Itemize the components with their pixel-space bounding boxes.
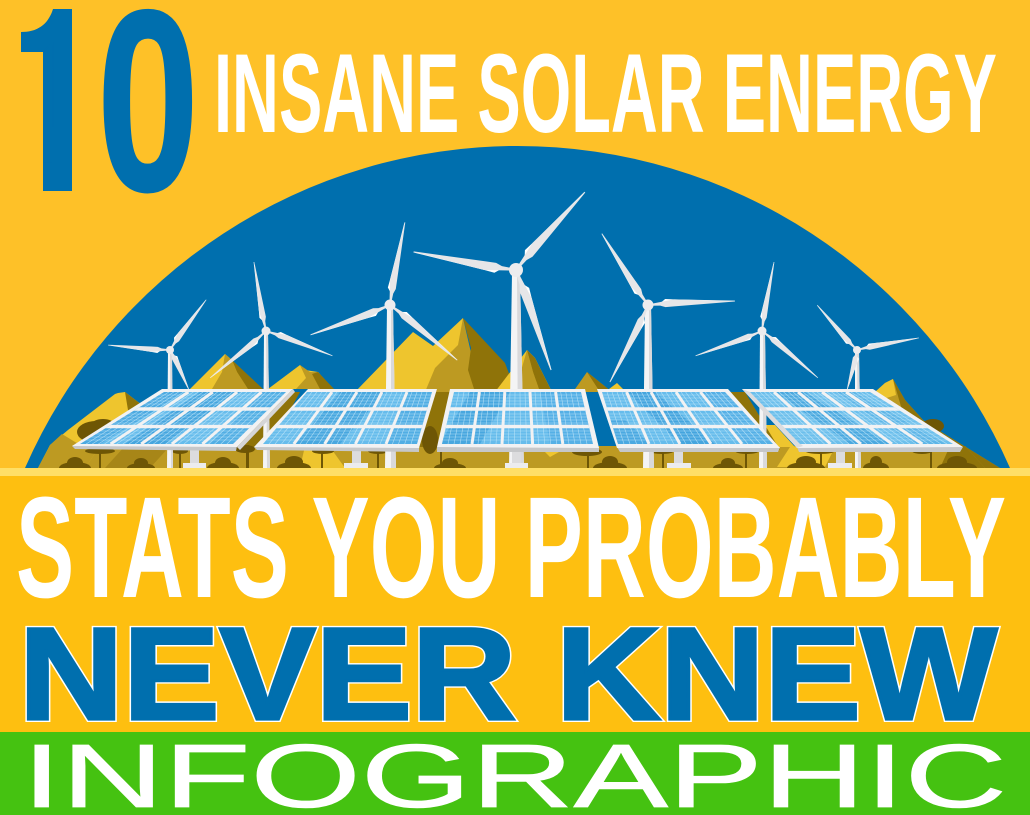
solar panel 4 — [597, 389, 780, 452]
turbine 3 — [309, 221, 461, 468]
trees — [59, 419, 977, 474]
solar panel stands — [183, 449, 852, 468]
solar panel 3 — [437, 389, 599, 452]
title line: never knew: NEVER KNEW — [19, 600, 997, 747]
sky dome — [25, 146, 1010, 468]
mountains — [38, 318, 1000, 468]
solar panel 5 — [742, 389, 963, 452]
lower background — [0, 476, 1030, 732]
green banner — [0, 732, 1030, 815]
turbine 2 — [209, 262, 334, 468]
ground strip — [0, 468, 1030, 476]
turbine 4 — [412, 188, 588, 468]
title line: never knew: NEVER KNEW — [19, 600, 997, 747]
solar panel 2 — [254, 389, 437, 452]
solar panel 1 — [72, 389, 295, 451]
turbine 7 — [814, 304, 919, 468]
turbine 6 — [695, 261, 821, 468]
title number: 10 — [21, 8, 192, 194]
turbine 1 — [108, 297, 208, 468]
turbine 5 — [597, 232, 735, 468]
